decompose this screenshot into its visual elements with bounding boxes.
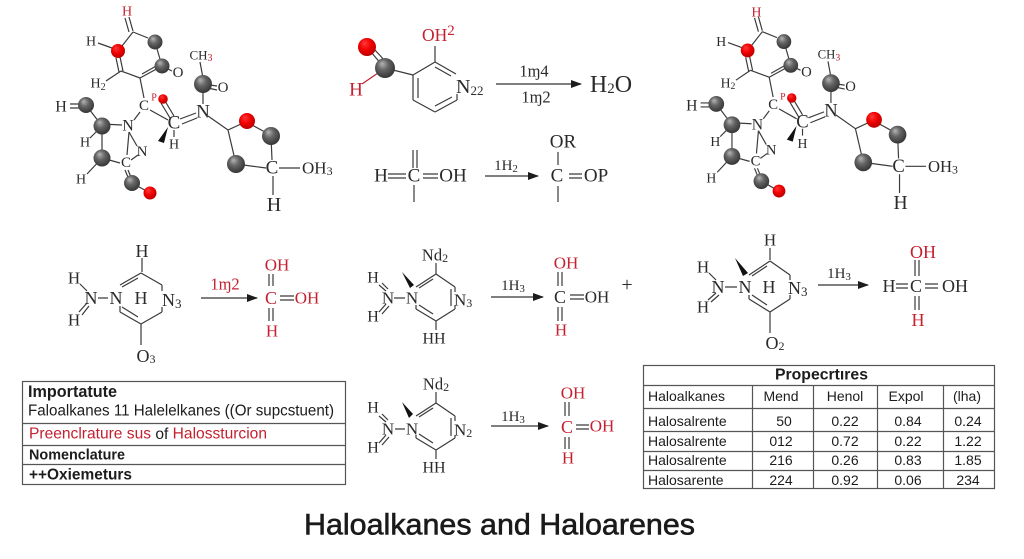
molecule: top right ball-and-stick: N	[752, 116, 764, 133]
reaction: fourth row middle: N	[382, 420, 394, 438]
reaction: third row right: N	[738, 277, 752, 297]
table rows: 012	[769, 433, 793, 449]
table rows: 216	[769, 452, 793, 468]
reaction: third row right: O	[766, 333, 778, 353]
reaction: third row left: N	[110, 288, 122, 308]
reaction: fourth row middle: H	[367, 400, 379, 416]
table rows: 234	[956, 472, 980, 488]
molecule: top right ball-and-stick: N	[766, 142, 777, 159]
reaction: third row middle: H	[367, 270, 379, 286]
molecule: top right ball-and-stick: C	[768, 97, 778, 113]
reaction: third row right: OH	[942, 276, 968, 296]
table rows: 0.83	[894, 452, 922, 468]
reaction: third row left: H	[136, 241, 148, 261]
reaction: third row right: 3	[801, 284, 808, 298]
table rows: 0.72	[831, 433, 859, 449]
molecule: top left ball-and-stick: H	[86, 34, 96, 50]
molecule: top right ball-and-stick: 2	[731, 81, 736, 92]
reaction: second row middle: OH	[439, 166, 467, 186]
reaction: top middle ring to water: 22	[470, 82, 483, 98]
table header: (lha)	[953, 388, 981, 404]
reaction: third row middle: H	[367, 308, 379, 326]
table rows: 0.24	[954, 413, 982, 429]
table rows: 0.26	[831, 452, 859, 468]
reaction: third row right: N	[712, 277, 724, 297]
reaction: second row middle: OP	[584, 166, 608, 186]
molecule: top left ball-and-stick: O	[218, 80, 229, 96]
table rows: Halosalrente	[648, 413, 727, 429]
reaction: top middle ring to water: OH	[422, 25, 447, 45]
reaction: third row right: H	[697, 258, 709, 276]
table rows	[648, 413, 982, 488]
reaction: third row right: N	[788, 278, 801, 298]
molecule: top right ball-and-stick: O	[801, 64, 812, 80]
reaction: fourth row middle: N	[406, 420, 418, 438]
molecule: top right ball-and-stick: H	[716, 34, 726, 49]
molecule: top left ball-and-stick: 3	[208, 52, 213, 64]
reaction: third row left: H	[68, 310, 80, 330]
arrow: third row middle	[491, 296, 543, 298]
reaction: third row middle: OH	[554, 254, 578, 272]
molecule: top left ball-and-stick: C	[168, 112, 180, 134]
table rows: 0.22	[894, 433, 922, 449]
reaction: third row middle: 3	[519, 283, 525, 295]
molecule: top left ball-and-stick: O	[173, 65, 184, 81]
table header: Expol	[888, 388, 924, 404]
molecule: top right ball-and-stick: H	[893, 192, 908, 214]
reaction: third row middle: 3	[466, 296, 472, 310]
reaction: fourth row middle: 3	[519, 414, 525, 426]
heading: importance: Importatute	[28, 383, 117, 401]
table header: Mend	[763, 388, 799, 404]
reaction: third row right: H	[882, 276, 896, 296]
reaction: fourth row middle: 1H	[501, 409, 519, 425]
reaction: top middle ring to water: H	[590, 72, 607, 98]
table header: Henol	[827, 388, 863, 404]
table rows: 1.85	[954, 452, 982, 468]
table header	[648, 388, 981, 404]
table rows: 0.92	[831, 472, 859, 488]
molecule: top left ball-and-stick: OH	[302, 158, 327, 178]
reaction: third row middle: N	[454, 290, 466, 310]
reaction: third row right: H	[912, 310, 924, 330]
reaction: third row left: H	[134, 288, 148, 308]
molecule: top right ball-and-stick: H	[710, 134, 720, 149]
arrow: third row right	[818, 284, 868, 286]
reaction: third row left: 3	[175, 296, 182, 310]
reaction: third row middle: Nd	[422, 246, 442, 264]
reaction: third row right: OH	[910, 242, 936, 262]
table rows: 0.22	[831, 413, 859, 429]
table header: Haloalkanes	[648, 388, 725, 404]
text block: description: Faloalkanes 11 Halelelkanes ((Or supcstuent)	[28, 402, 334, 420]
reaction: second row middle: C	[408, 166, 420, 186]
molecule: top right ball-and-stick: O	[845, 79, 856, 95]
molecule: top right ball-and-stick: C	[892, 156, 905, 177]
molecule: top left ball-and-stick: N	[122, 118, 134, 134]
text block: red nomenclature line: Preenclrature sus of Halossturcion	[29, 426, 267, 442]
molecule: top right ball-and-stick	[686, 4, 958, 214]
reaction: third row middle: 1H	[501, 278, 519, 294]
reaction: second row middle: C	[551, 166, 563, 186]
reaction: second row middle: 1H	[494, 158, 512, 174]
reaction: third row middle: 2	[442, 251, 448, 265]
reaction: third row middle: N	[406, 288, 418, 308]
molecule: top left ball-and-stick: CH	[189, 48, 208, 62]
molecule: top left ball-and-stick: C	[139, 98, 149, 114]
reaction: third row middle: OH	[585, 288, 609, 306]
reaction: fourth row middle: 2	[443, 380, 449, 394]
reaction: fourth row middle: HH	[422, 460, 446, 476]
molecule: top left ball-and-stick: N	[196, 102, 210, 122]
reaction: second row middle	[374, 132, 608, 202]
molecule: top right ball-and-stick: H	[721, 76, 731, 91]
reaction: third row middle: HH	[422, 330, 446, 348]
reaction: third row right: 1H	[827, 266, 845, 282]
reaction: third row left: OH	[265, 256, 289, 274]
molecule: top left ball-and-stick: P	[151, 92, 157, 104]
arrow: fourth row	[491, 425, 548, 427]
panel: importance and nomenclature box	[22, 382, 346, 484]
reaction: third row right: H	[764, 230, 776, 250]
reaction: third row middle	[367, 246, 633, 348]
molecule: top left ball-and-stick: C	[121, 155, 131, 171]
reaction: third row left: H	[266, 322, 278, 340]
molecule: top right ball-and-stick: 3	[952, 162, 958, 176]
molecule: top left ball-and-stick: N	[137, 144, 148, 160]
reaction: third row right: H	[762, 277, 776, 297]
reaction: fourth row middle: H	[562, 448, 574, 468]
molecule: top right ball-and-stick: H	[752, 4, 761, 19]
molecule: top left ball-and-stick: 2	[101, 82, 106, 92]
arrow: to water	[496, 83, 581, 85]
molecule: top left ball-and-stick: H	[76, 172, 86, 188]
reaction: top middle ring to water: 2	[447, 23, 455, 39]
molecule: top left ball-and-stick: H	[169, 138, 179, 152]
reaction: third row middle: +	[621, 274, 633, 296]
reaction: fourth row middle: H	[367, 440, 379, 456]
molecule: top left ball-and-stick: H	[80, 136, 90, 150]
molecule: top right ball-and-stick: C	[751, 153, 761, 169]
text block: oxiemeturs: ++Oxiemeturs	[29, 466, 132, 484]
table rows: 50	[776, 413, 792, 429]
reaction: third row right: 3	[845, 271, 851, 283]
molecule: top right ball-and-stick: CH	[818, 47, 835, 61]
wedge bond	[158, 127, 168, 143]
title: Haloalkanes and Haloarenes	[304, 508, 695, 542]
reaction: third row left: C	[265, 288, 277, 308]
molecule: top right ball-and-stick: N	[824, 100, 838, 121]
molecule: top left ball-and-stick	[55, 4, 333, 216]
arrow: second row	[485, 175, 538, 177]
molecule: top left ball-and-stick: H	[90, 76, 101, 92]
reaction: second row middle: 2	[512, 163, 518, 175]
table title: Propecrtıres	[775, 366, 868, 384]
table rows: Halosalrente	[648, 433, 727, 449]
reaction: fourth row middle: Nd	[423, 374, 443, 394]
reaction: fourth row middle: OH	[590, 416, 614, 436]
reaction: top middle ring to water: 1ɱ2	[521, 88, 551, 106]
molecule: top left ball-and-stick: H	[122, 4, 132, 20]
arrow: third row left	[201, 297, 257, 299]
reaction: second row middle: OR	[550, 132, 577, 152]
reaction: third row left: 1ɱ2	[210, 274, 240, 294]
reaction: fourth row middle: N	[454, 420, 466, 440]
reaction: third row left: 3	[150, 352, 156, 366]
reaction: third row right: H	[697, 298, 709, 316]
molecule: top right ball-and-stick: C	[796, 111, 809, 132]
molecule: top right ball-and-stick: H	[798, 136, 808, 151]
reaction: top middle ring to water: O	[615, 72, 632, 98]
reaction: top middle ring to water	[349, 23, 632, 112]
table rows: 0.84	[894, 413, 922, 429]
reaction: third row left: N	[162, 290, 175, 310]
table rows: Halosalrente	[648, 452, 727, 468]
table rows: 0.06	[894, 472, 922, 488]
molecule: top left ball-and-stick: C	[266, 158, 278, 178]
molecule: top right ball-and-stick: H	[686, 97, 697, 114]
reaction: third row left: OH	[295, 288, 319, 308]
molecule: top right ball-and-stick: OH	[928, 157, 952, 176]
reaction: third row right: C	[910, 276, 922, 296]
reaction: second row middle: H	[374, 166, 388, 186]
reaction: third row middle: H	[555, 320, 567, 340]
reaction: fourth row middle: C	[561, 417, 573, 437]
reaction: third row left	[68, 241, 319, 366]
table rows: 224	[769, 472, 793, 488]
reaction: top middle ring to water: N	[456, 76, 470, 98]
reaction: third row left: O	[136, 346, 150, 366]
molecule: top left ball-and-stick: H	[267, 194, 281, 216]
reaction: fourth row middle: OH	[561, 384, 585, 402]
reaction: third row right	[697, 230, 968, 353]
reaction: third row left: H	[68, 268, 80, 288]
reaction: top middle ring to water: 1ɱ4	[519, 62, 549, 80]
reaction: top middle ring to water: 2	[607, 81, 615, 97]
reaction: third row left: N	[84, 288, 98, 308]
reaction: third row middle: C	[554, 287, 566, 307]
molecule: top right ball-and-stick: 3	[835, 52, 840, 63]
molecule: top left ball-and-stick: 3	[327, 164, 333, 178]
table rows: 1.22	[954, 433, 982, 449]
panel: properties table	[643, 366, 995, 489]
reaction: top middle ring to water: H	[349, 80, 363, 100]
table rows: Halosarente	[648, 472, 724, 488]
reaction: third row middle: N	[382, 288, 394, 308]
molecule: top left ball-and-stick: H	[55, 98, 67, 116]
reaction: fourth row middle	[367, 374, 614, 476]
text block: nomenclature: Nomenclature	[29, 446, 125, 464]
reaction: third row right: 2	[778, 339, 784, 353]
molecule: top right ball-and-stick: P	[780, 91, 786, 103]
molecule: top right ball-and-stick: H	[706, 171, 716, 186]
reaction: fourth row middle: 2	[466, 426, 472, 440]
